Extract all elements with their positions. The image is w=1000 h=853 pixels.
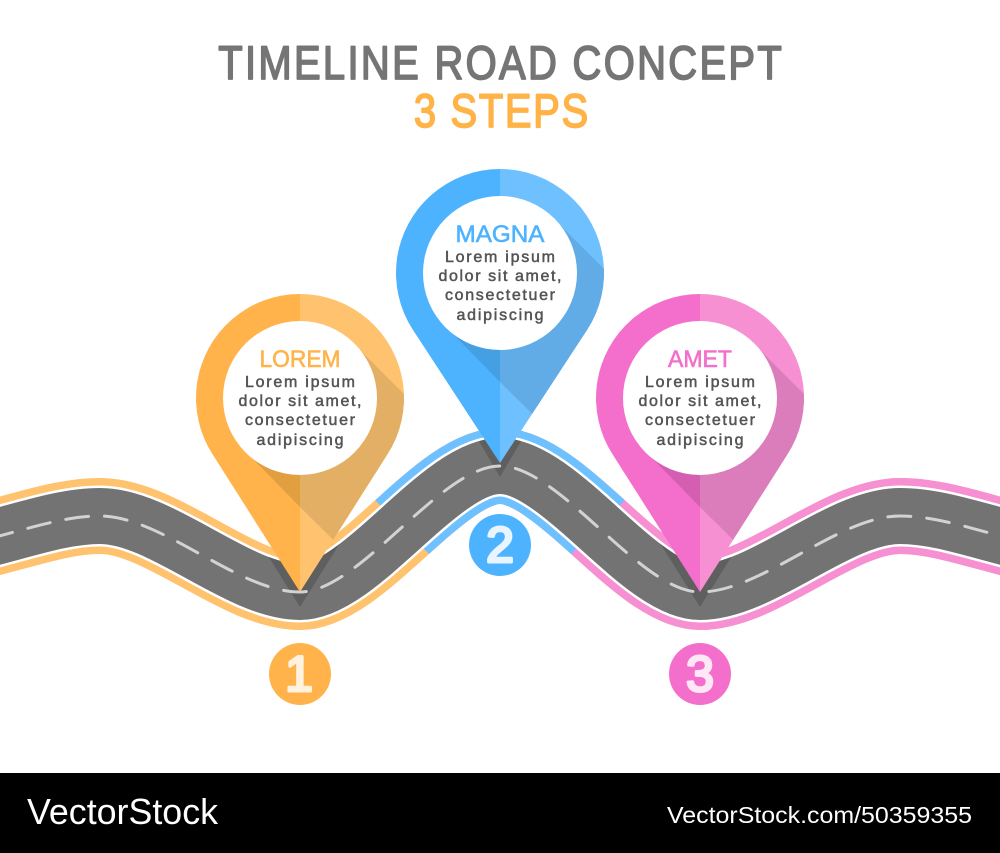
step number 3 bbox=[669, 643, 731, 705]
pin: Lorem bbox=[196, 294, 404, 592]
pin text bbox=[638, 374, 762, 449]
road edge: pink bbox=[500, 466, 1000, 592]
pin text: Lorem ipsum bbox=[445, 249, 555, 266]
pin body bbox=[596, 294, 804, 592]
pin body bbox=[396, 169, 604, 463]
pin: Magna bbox=[396, 169, 604, 463]
subtitle: 3 STEPS bbox=[414, 86, 588, 138]
pin text: adipiscing bbox=[256, 432, 344, 449]
white road border bbox=[0, 466, 1000, 592]
step number 2: 2 bbox=[486, 517, 514, 573]
winding road bbox=[0, 466, 1000, 592]
road edge: orange bbox=[0, 466, 1000, 592]
footer image id: VectorStock.com/50359355 bbox=[667, 802, 972, 828]
pin text: Lorem ipsum bbox=[245, 374, 355, 391]
footer logo: VectorStock bbox=[27, 791, 219, 832]
pin text: consectetuer bbox=[245, 412, 356, 429]
footer bar bbox=[0, 773, 1000, 853]
pin shadows on road bbox=[268, 440, 732, 606]
step number 1 bbox=[269, 643, 331, 705]
pin: Amet bbox=[596, 294, 804, 592]
pin text: dolor sit amet, bbox=[438, 268, 562, 285]
title bbox=[218, 38, 782, 138]
step number 1: 1 bbox=[285, 646, 313, 702]
pin text: dolor sit amet, bbox=[238, 393, 362, 410]
pin text bbox=[238, 374, 362, 449]
road edge: blue bbox=[375, 430, 625, 554]
white circle bbox=[223, 321, 377, 475]
title: TIMELINE ROAD CONCEPT bbox=[218, 38, 782, 90]
pin text: adipiscing bbox=[456, 307, 544, 324]
pin text: consectetuer bbox=[645, 412, 756, 429]
pin heading: MAGNA bbox=[456, 221, 544, 248]
white circle bbox=[423, 196, 577, 350]
pin heading: LOREM bbox=[260, 346, 340, 373]
step number 2 bbox=[469, 514, 531, 576]
pin text bbox=[438, 249, 562, 324]
pin heading: AMET bbox=[668, 346, 732, 373]
step number 3: 3 bbox=[686, 646, 714, 702]
pin text: adipiscing bbox=[656, 432, 744, 449]
asphalt bbox=[0, 466, 1000, 592]
road centre dashes bbox=[0, 466, 1000, 592]
pin body bbox=[196, 294, 404, 592]
white circle bbox=[623, 321, 777, 475]
pin text: dolor sit amet, bbox=[638, 393, 762, 410]
pin text: consectetuer bbox=[445, 287, 556, 304]
pin text: Lorem ipsum bbox=[645, 374, 755, 391]
